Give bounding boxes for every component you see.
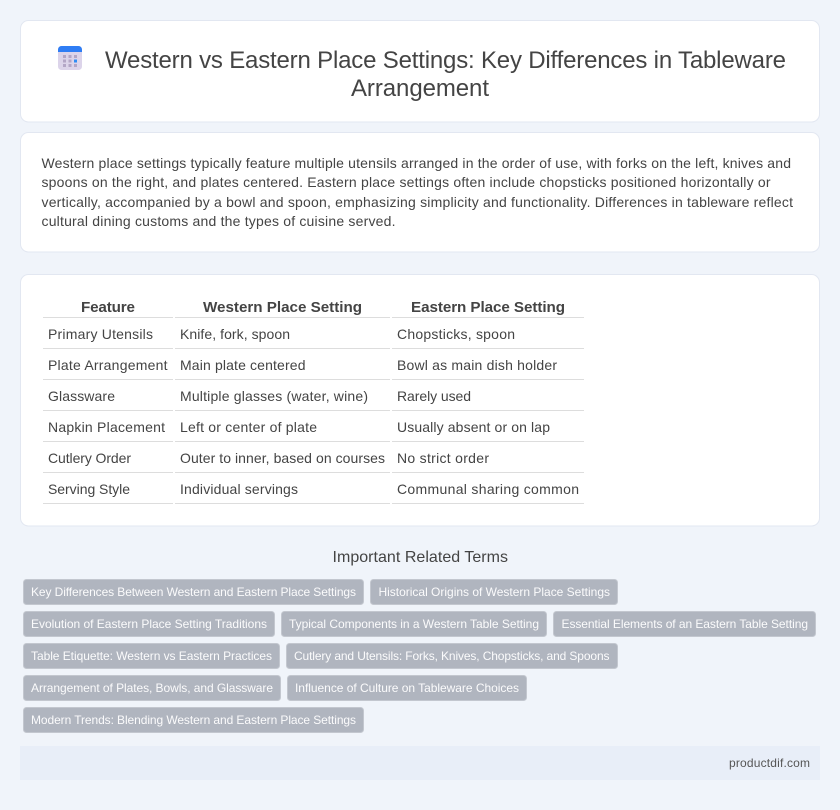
table row: plate arrangement: Main plate centered [180, 357, 306, 373]
icon: calendar grid [58, 46, 82, 70]
tag: Arrangement of Plates, Bowls, and Glassware [31, 681, 273, 695]
table row: cutlery order: Outer to inner, based on courses [180, 450, 385, 466]
table row: cutlery order [43, 450, 584, 473]
tag: Typical Components in a Western Table Setting [289, 617, 539, 631]
footer bar [20, 746, 820, 780]
tag: Historical Origins of Western Place Settings [378, 585, 610, 599]
title: Arrangement [351, 75, 489, 102]
tag: Essential Elements of an Eastern Table Setting [562, 617, 808, 631]
title [105, 47, 786, 102]
table row: plate arrangement: Bowl as main dish holder [397, 357, 557, 373]
table row: napkin placement: Left or center of plate [180, 419, 317, 435]
table row: glassware: Rarely used [397, 388, 471, 404]
tag [24, 708, 364, 732]
tag: Table Etiquette: Western vs Eastern Practices [31, 649, 272, 663]
table row: cutlery order: No strict order [397, 450, 489, 466]
table row: glassware [43, 388, 584, 411]
tag: Evolution of Eastern Place Setting Traditions [31, 617, 267, 631]
panel: header [20, 20, 820, 122]
table row: plate arrangement [43, 357, 584, 380]
table row: napkin placement [43, 419, 584, 442]
tag: Influence of Culture on Tableware Choices [295, 681, 519, 695]
title: Western vs Eastern Place Settings: Key Differences in Tableware [105, 47, 786, 74]
table row: primary utensils: Knife, fork, spoon [180, 326, 290, 342]
table row: primary utensils: Primary Utensils [48, 326, 153, 342]
table row: serving style: Communal sharing common [397, 481, 579, 497]
tag: Key Differences Between Western and Eastern Place Settings [31, 585, 356, 599]
tag: Cutlery and Utensils: Forks, Knives, Chopsticks, and Spoons [294, 649, 610, 663]
text block: summary: vertically, accompanied by a bowl and spoon, emphasizing simplicity and functionality. Differences in tableware reflect [42, 194, 793, 210]
tag [24, 676, 280, 700]
table row: serving style [43, 481, 584, 504]
tag: Modern Trends: Blending Western and Eastern Place Settings [31, 713, 356, 727]
table header: Western Place Setting [203, 299, 362, 316]
tag [24, 644, 280, 668]
table row: glassware: Glassware [48, 388, 115, 404]
table row: serving style: Serving Style [48, 481, 130, 497]
table header: Feature [81, 299, 135, 316]
table row: primary utensils [43, 326, 584, 349]
footer bar: productdif.com [729, 756, 810, 770]
table row: primary utensils: Chopsticks, spoon [397, 326, 515, 342]
table row: napkin placement: Usually absent or on lap [397, 419, 550, 435]
tag [282, 612, 546, 636]
table row: napkin placement: Napkin Placement [48, 419, 165, 435]
tag [554, 612, 816, 636]
tag [370, 580, 618, 604]
table row: plate arrangement: Plate Arrangement [48, 357, 168, 373]
text block: summary: spoons on the right, and plates centered. Eastern place settings often include chopsticks positioned horizontally or [42, 174, 771, 190]
panel: summary paragraph [20, 132, 820, 252]
heading: important related terms: Important Related Terms [332, 549, 508, 566]
table row: serving style: Individual servings [180, 481, 298, 497]
text block: summary [42, 155, 793, 229]
table header [43, 299, 584, 318]
table row: cutlery order: Cutlery Order [48, 450, 131, 466]
text block: summary: cultural dining customs and the types of cuisine served. [42, 213, 396, 229]
table row: glassware: Multiple glasses (water, wine) [180, 388, 368, 404]
text block: summary: Western place settings typically feature multiple utensils arranged in the order of use, with forks on the left, knives and [42, 155, 791, 171]
tag [24, 612, 274, 636]
table header: Eastern Place Setting [411, 299, 565, 316]
tag [24, 580, 364, 604]
related terms tags [24, 580, 816, 732]
tag [288, 676, 526, 700]
tag [286, 644, 618, 668]
panel: comparison table [20, 274, 820, 526]
